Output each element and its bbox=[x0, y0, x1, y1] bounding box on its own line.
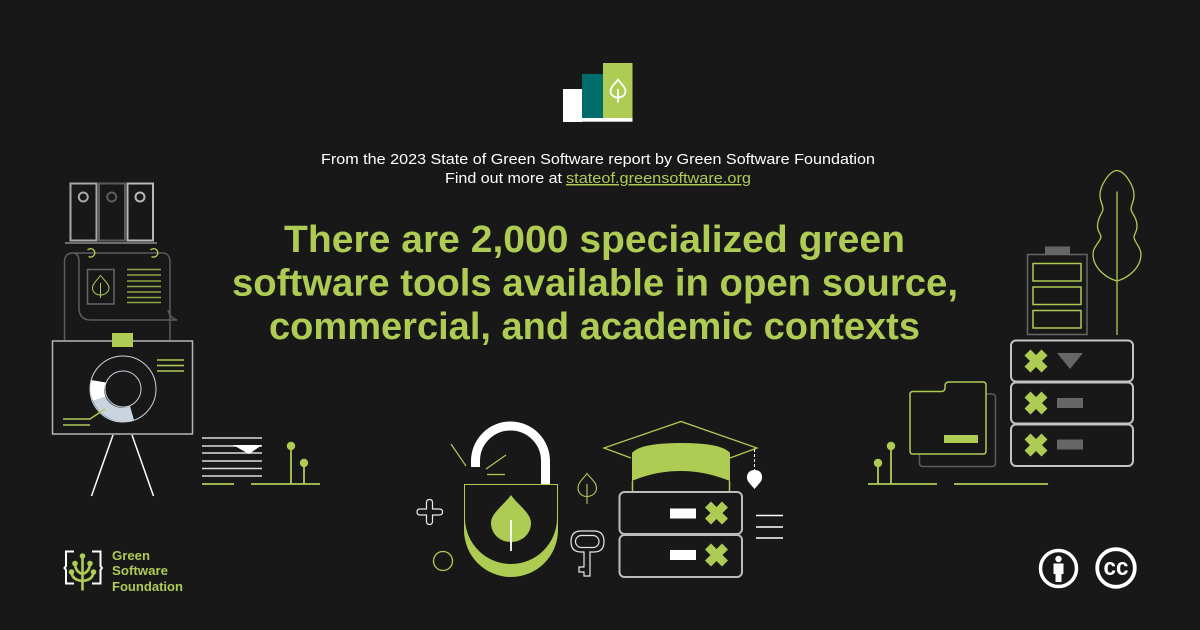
headline: commercial, and academic contexts bbox=[269, 306, 920, 348]
source text: From the 2023 State of Green Software report by Green Software Foundation bbox=[321, 152, 875, 168]
source text: Find out more at bbox=[445, 171, 562, 187]
icon: creative commons licence badge: cc bbox=[1104, 554, 1128, 581]
wordmark: Foundation bbox=[112, 580, 183, 594]
icon: creative commons licence badge bbox=[1097, 549, 1135, 587]
icon: small leaf bbox=[578, 474, 596, 504]
headline: software tools available in open source, bbox=[232, 262, 958, 304]
icon: bracketed tree bbox=[64, 552, 102, 590]
icon: graduation cap bbox=[604, 422, 762, 493]
icon: three lines bbox=[756, 516, 783, 538]
wordmark: Green bbox=[112, 549, 150, 563]
icon: key bbox=[571, 531, 604, 576]
icon: report logo bars bbox=[563, 63, 632, 122]
icon: open padlock bbox=[451, 426, 558, 577]
icon: circle bbox=[434, 552, 452, 570]
icon: tree bbox=[1093, 170, 1141, 335]
icon: binders bbox=[65, 184, 157, 243]
icon: text lines with marker bbox=[202, 438, 262, 476]
icon: attribution licence badge bbox=[1040, 550, 1076, 586]
icon: easel legs bbox=[92, 435, 154, 496]
source text bbox=[321, 152, 875, 187]
illustration: right tree, battery, folder and servers bbox=[868, 170, 1141, 484]
icon: plus bbox=[417, 500, 442, 524]
wordmark: Software bbox=[112, 564, 168, 578]
icon: ground with sprouts bbox=[202, 443, 320, 484]
icon: server stack with marks bbox=[1011, 340, 1133, 466]
headline bbox=[232, 219, 958, 348]
source text: stateof.greensoftware.org bbox=[566, 171, 751, 187]
icon: server stack bbox=[620, 492, 742, 577]
chart: donut on presentation board bbox=[52, 333, 192, 434]
icon: ground with sprouts bbox=[868, 443, 1048, 484]
headline: There are 2,000 specialized green bbox=[284, 219, 905, 261]
illustration: center lock, key and graduation server bbox=[417, 422, 783, 577]
icon: battery bbox=[1028, 246, 1087, 334]
wordmark bbox=[112, 549, 183, 594]
icon: folders bbox=[910, 382, 996, 466]
illustration: left presentation group bbox=[52, 184, 320, 496]
icon: scroll document bbox=[64, 249, 177, 341]
logo: Green Software Foundation bbox=[64, 549, 183, 594]
